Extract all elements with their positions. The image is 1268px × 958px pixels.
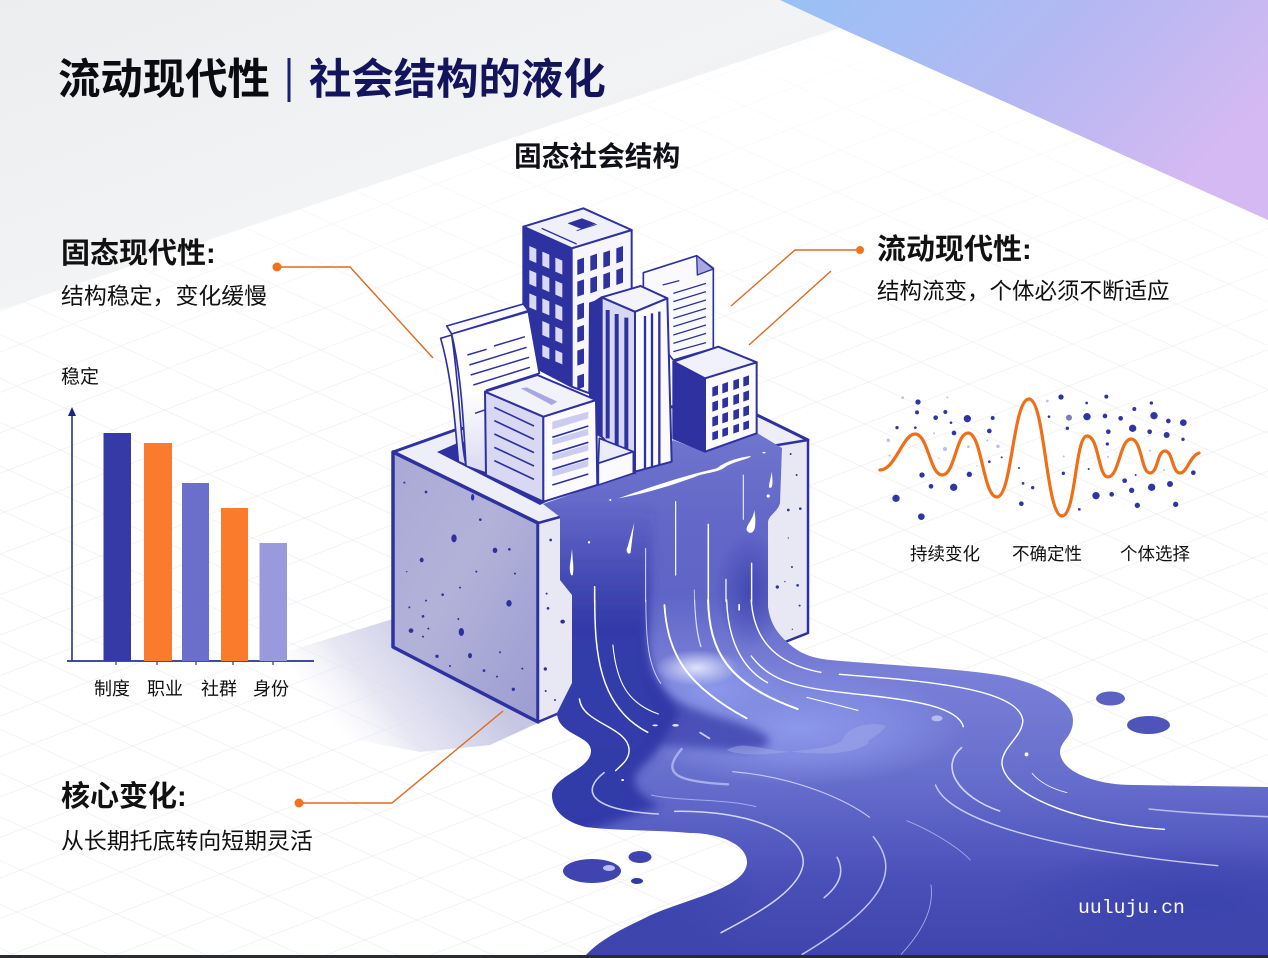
title: 流动现代性	[58, 56, 270, 103]
liquid top gloss and drips	[570, 452, 773, 647]
callout line: solid modernity	[272, 262, 433, 358]
text block: solid modernity	[61, 237, 267, 309]
bar labels	[94, 679, 289, 699]
bar: fourth orange	[221, 508, 248, 661]
bar labels: 制度	[94, 679, 130, 699]
title: 社会结构的液化	[309, 56, 606, 103]
front box building	[485, 375, 597, 502]
block right section	[760, 440, 808, 642]
subtitle: solid social structure: 固态社会结构	[514, 141, 680, 172]
tower	[523, 208, 632, 393]
text block: solid modernity: 固态现代性:	[61, 237, 216, 270]
text block: core change: 从长期托底转向短期灵活	[61, 828, 313, 854]
bottom strip	[0, 955, 1268, 958]
bar chart: stability	[61, 366, 314, 699]
bar: institution	[104, 433, 131, 661]
callout lines: liquid modernity	[731, 246, 864, 345]
stepped base	[598, 438, 633, 485]
striped tower	[590, 286, 672, 473]
block cast shadow	[285, 619, 540, 752]
orange wave	[880, 399, 1199, 516]
text block: liquid modernity: 结构流变，个体必须不断适应	[877, 279, 1170, 304]
wave labels: 持续变化	[910, 544, 980, 564]
particles	[887, 394, 1196, 520]
concrete block	[393, 400, 808, 722]
text block: solid modernity: 结构稳定，变化缓慢	[61, 283, 267, 309]
left document	[441, 304, 539, 473]
bar labels: 职业	[147, 679, 183, 699]
text block: core change	[61, 780, 313, 854]
bar labels: 身份	[253, 679, 289, 699]
callout line: core change	[294, 711, 503, 808]
block front strip	[538, 517, 578, 722]
concrete specks	[403, 453, 802, 701]
text block: liquid modernity: 流动现代性:	[877, 233, 1032, 266]
buildings and documents	[441, 208, 757, 502]
watermark: uuluju.cn	[1078, 897, 1185, 919]
bar: community	[182, 483, 209, 661]
text block: core change: 核心变化:	[61, 780, 187, 813]
block left face	[393, 452, 538, 722]
block cavity	[437, 441, 560, 505]
wave labels: 个体选择	[1120, 544, 1190, 564]
flowing liquid river	[510, 430, 1268, 958]
right document	[643, 256, 713, 360]
river current streaks	[579, 600, 1268, 954]
puddles	[563, 692, 1170, 884]
block top rim	[393, 400, 808, 524]
small cube building	[673, 347, 757, 452]
wave and particles chart	[880, 394, 1199, 564]
bar: occupation	[144, 443, 172, 661]
text block: liquid modernity	[877, 233, 1170, 304]
wave labels: 不确定性	[1012, 544, 1082, 564]
bar chart: stability: 稳定	[61, 366, 99, 388]
bar labels: 社群	[201, 679, 237, 699]
wave labels	[910, 544, 1190, 564]
bar: identity	[260, 543, 287, 661]
title	[58, 56, 606, 103]
